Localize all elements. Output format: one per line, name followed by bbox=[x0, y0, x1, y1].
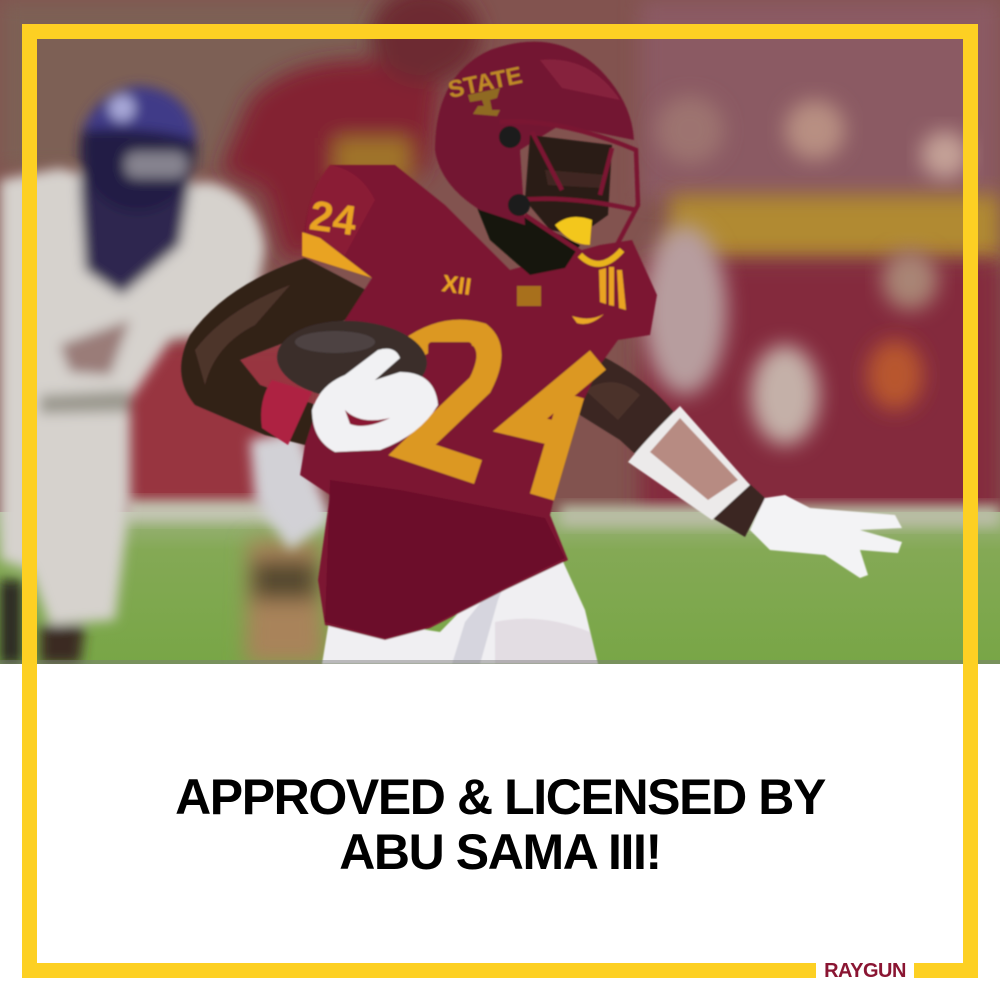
right arm (far) bbox=[572, 355, 765, 537]
blurred stadium background bbox=[0, 0, 1000, 664]
glove on ball bbox=[312, 349, 438, 452]
helmet facemask bbox=[500, 122, 638, 258]
pants bbox=[322, 550, 598, 664]
jersey number 24 bbox=[410, 332, 598, 497]
arm guard bbox=[628, 406, 750, 520]
helmet STATE logo: STATE bbox=[446, 62, 525, 104]
neck and towel bbox=[470, 190, 580, 275]
sleeve number: 24 bbox=[307, 191, 360, 245]
face bbox=[525, 135, 612, 235]
blurred opposing player in white and purple bbox=[0, 86, 330, 664]
mouthguard bbox=[555, 217, 592, 245]
sleeve stripe bbox=[302, 232, 372, 278]
jersey bbox=[300, 165, 657, 640]
main player bbox=[181, 42, 902, 664]
glove far hand bbox=[750, 495, 902, 578]
helmet bbox=[435, 42, 634, 225]
football bbox=[275, 317, 429, 403]
wristband bbox=[261, 380, 312, 445]
brand logo: RAYGUN bbox=[824, 960, 906, 982]
headline: ABU SAMA III! bbox=[339, 824, 661, 880]
chest details: XII bbox=[440, 270, 473, 301]
headline: APPROVED & LICENSED BY bbox=[175, 769, 825, 825]
blurred background player in maroon bbox=[220, 0, 480, 664]
photo: Iowa State running back carrying football bbox=[0, 0, 1000, 664]
headline bbox=[175, 769, 826, 880]
left arm bbox=[181, 258, 385, 450]
